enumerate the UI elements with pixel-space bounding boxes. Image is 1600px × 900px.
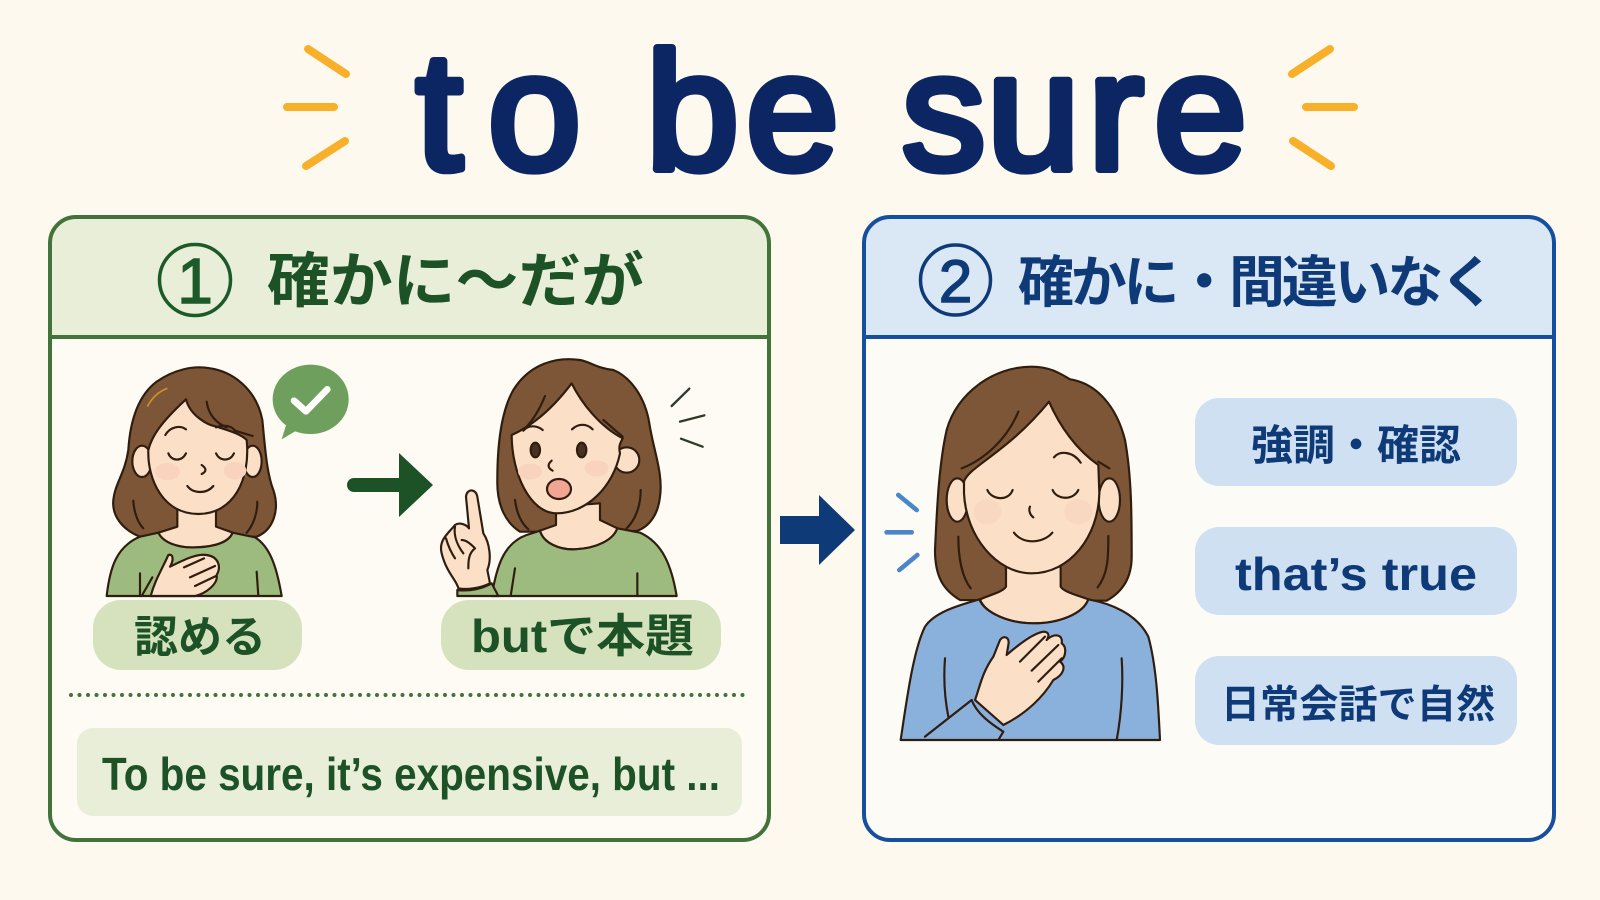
tag: emphasis (1195, 398, 1517, 486)
arrow: acknowledge to main point (347, 453, 433, 517)
number badge 1: 1 (177, 245, 213, 317)
illustration: woman raising finger (441, 359, 704, 596)
example sentence (77, 728, 742, 816)
tag: that's true: that’s true (1235, 548, 1477, 600)
label: main point: butで本題 (471, 610, 694, 662)
tag: natural in conversation (1195, 656, 1517, 745)
panel 2 border (864, 217, 1554, 840)
panel: meaning 2 (864, 217, 1554, 840)
illustration: woman hand on chest (887, 367, 1160, 740)
panel 1 border (50, 217, 769, 840)
icon: right title sparkle (1292, 49, 1354, 166)
panel 1 heading: 確かに〜だが (267, 248, 644, 315)
tag: emphasis: 強調・確認 (1251, 422, 1461, 469)
panel 1 header band (50, 217, 769, 337)
number badge 2: 2 (939, 248, 972, 315)
illustration: woman acknowledging (107, 367, 282, 596)
icon: check speech bubble (273, 365, 349, 439)
title: to be sure (416, 19, 1247, 205)
arrow: between panels (780, 495, 855, 565)
tag: that's true (1195, 527, 1517, 615)
number badge 1 (160, 244, 230, 317)
tag: natural in conversation: 日常会話で自然 (1221, 684, 1495, 727)
panel 2 heading: 確かに・間違いなく (1018, 251, 1496, 314)
example sentence: To be sure, it’s expensive, but ... (102, 748, 720, 800)
panel: meaning 1 (50, 217, 769, 840)
label: main point (441, 600, 721, 670)
number badge 2 (920, 245, 990, 315)
label: acknowledge (93, 600, 302, 670)
label: acknowledge: 認める (134, 613, 266, 662)
panel 2 header band (864, 217, 1554, 337)
icon: left title sparkle (287, 49, 346, 166)
